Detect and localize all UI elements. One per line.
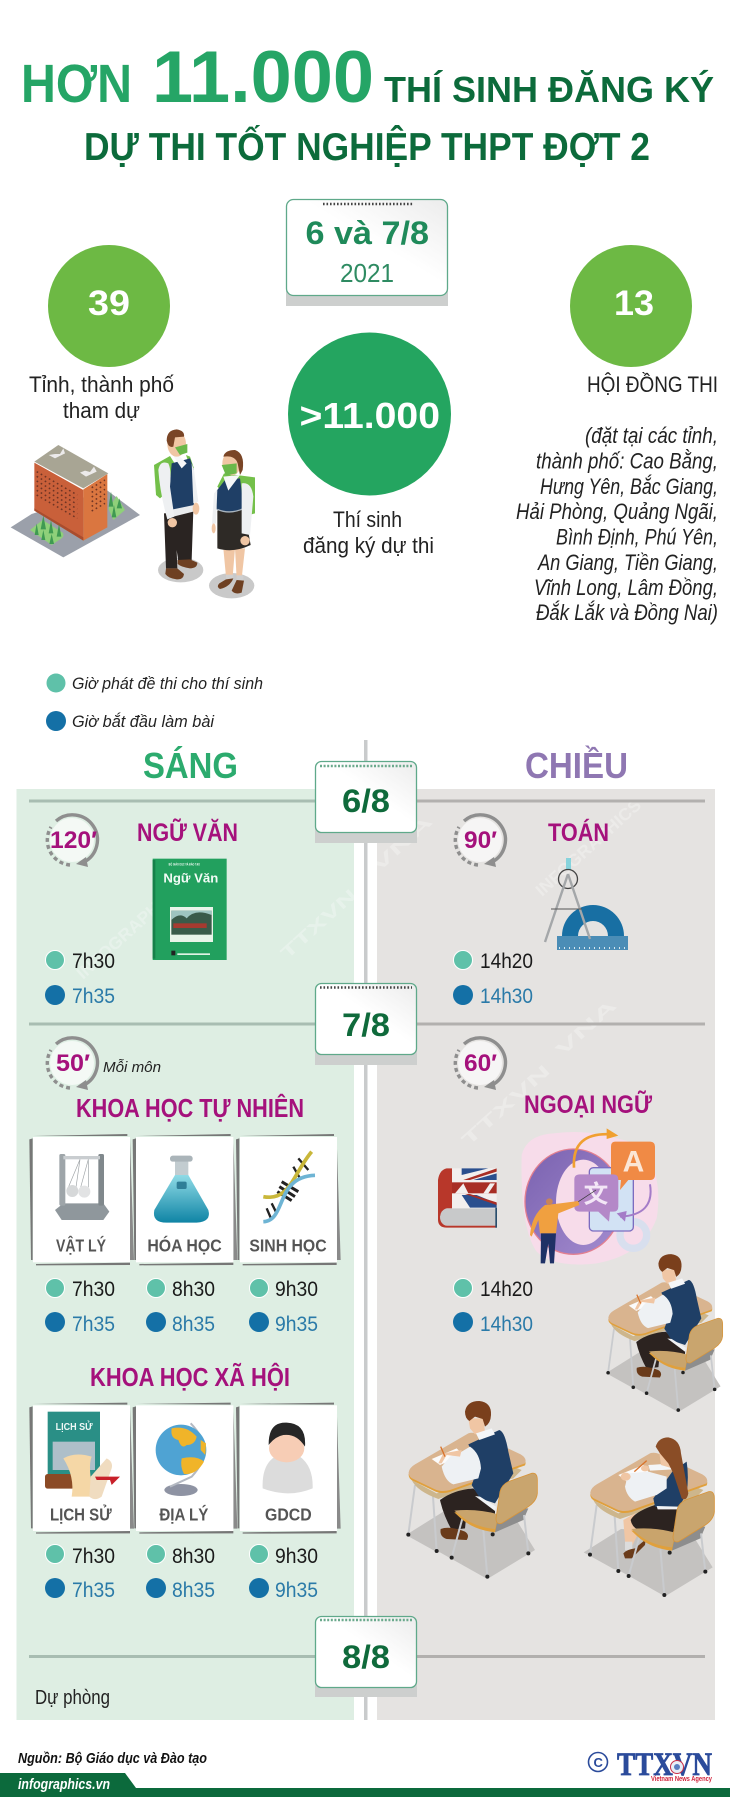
icon: compass and protractor	[545, 858, 628, 950]
watermarks: VNA	[368, 812, 436, 876]
stat: more than 11,000 candidates	[288, 332, 451, 558]
subject: foreign language: NGOẠI NGỮ	[524, 1089, 652, 1119]
times: Toán	[453, 950, 533, 1008]
times: biology: 9h30	[275, 1278, 318, 1301]
icon: male student with mask	[154, 429, 203, 582]
date tab: 8/8: 8/8	[342, 1639, 390, 1675]
icon: English book	[438, 1168, 497, 1228]
card: geography: ĐỊA LÝ	[159, 1504, 208, 1525]
legend	[46, 674, 263, 731]
times: history	[45, 1544, 115, 1602]
title	[21, 37, 714, 169]
stat: 39 provinces: 39	[88, 284, 130, 323]
calendar: exam dates	[286, 200, 448, 306]
stat: more than 11,000 candidates: đăng ký dự thi	[303, 533, 434, 558]
timer: 120 minutes	[47, 815, 97, 867]
icon: male student at desk, lower left	[406, 1401, 537, 1579]
watermarks: INFOGRAPHICS	[73, 879, 186, 983]
logo: TTXVN: Vietnam News Agency	[651, 1776, 712, 1783]
card: physics	[29, 1134, 134, 1265]
times: biology	[249, 1278, 318, 1336]
subject: Ngữ Văn: NGỮ VĂN	[137, 817, 238, 847]
text block: council locations	[516, 423, 718, 625]
date tab: 7/8: 7/8	[342, 1007, 390, 1043]
times: geography	[146, 1544, 215, 1602]
title: DỰ THI TỐT NGHIỆP THPT ĐỢT 2	[84, 124, 650, 169]
stat: 39 provinces	[29, 245, 174, 423]
card: chemistry	[133, 1134, 237, 1265]
timer: 60 minutes: 60′	[464, 1050, 497, 1077]
stat: 39 provinces: Tỉnh, thành phố	[29, 372, 174, 397]
icon: literature textbook	[153, 859, 227, 960]
timer: 90 minutes: 90′	[464, 827, 497, 854]
timer: 60 minutes	[455, 1038, 505, 1090]
icon: literature textbook: BỘ GIÁO DỤC VÀ ĐÀO TẠO	[169, 862, 200, 867]
timer: 50 minutes each subject: 50′	[56, 1050, 90, 1077]
times: physics: 7h30	[72, 1278, 115, 1301]
times: Ngữ Văn	[45, 950, 115, 1008]
stat: 13 exam councils	[570, 245, 718, 397]
timer: 120 minutes: 120′	[50, 827, 97, 854]
calendar: exam dates: 2021	[340, 258, 394, 288]
icon: female student at desk, lower right	[584, 1437, 714, 1597]
watermarks: TTXVN	[458, 1061, 554, 1150]
times: foreign language: 14h30	[480, 1313, 533, 1336]
stat: more than 11,000 candidates: >11.000	[300, 395, 440, 436]
panel: morning background	[16, 789, 354, 1720]
times: civics: 9h30	[275, 1545, 318, 1568]
times: geography: 8h30	[172, 1545, 215, 1568]
footer bar: infographics.vn	[18, 1776, 110, 1793]
footer bar	[0, 1773, 730, 1797]
logo: TTXVN: C	[594, 1755, 604, 1770]
date tab: 8/8	[315, 1616, 417, 1697]
times: physics: 7h35	[72, 1313, 115, 1336]
stat: more than 11,000 candidates: Thí sinh	[333, 507, 402, 532]
stat: 39 provinces: tham dự	[63, 398, 140, 423]
heading: natural sciences: KHOA HỌC TỰ NHIÊN	[76, 1093, 304, 1123]
logo: TTXVN	[588, 1747, 712, 1783]
times: history: 7h35	[72, 1579, 115, 1602]
times: Ngữ Văn: 7h35	[72, 985, 115, 1008]
title: THÍ SINH ĐĂNG KÝ	[384, 69, 714, 110]
times: Toán: 14h20	[480, 950, 533, 973]
panel: afternoon background	[377, 789, 715, 1720]
times: foreign language	[453, 1278, 533, 1336]
card: history: LỊCH SỬ	[56, 1420, 93, 1433]
watermarks: INFOGRAPHICS	[532, 796, 645, 900]
heading: morning: SÁNG	[143, 745, 238, 786]
watermarks: TTXVN	[277, 885, 360, 963]
icon: building	[11, 445, 140, 557]
logo: TTXVN: TTXVN	[617, 1747, 712, 1783]
times: biology: 9h35	[275, 1313, 318, 1336]
card: chemistry: HÓA HỌC	[147, 1235, 222, 1256]
card: biology: SINH HỌC	[249, 1236, 327, 1256]
timer: 50 minutes each subject	[47, 1038, 161, 1090]
calendar: exam dates: 6 và 7/8	[306, 215, 429, 251]
icon: translation illustration: 文	[584, 1180, 609, 1208]
icon: literature textbook: Ngữ Văn	[163, 871, 218, 886]
icon: translation illustration: A	[623, 1146, 644, 1179]
date tab: 7/8	[315, 984, 417, 1065]
watermarks: VNA	[552, 996, 620, 1060]
times: history: 7h30	[72, 1545, 115, 1568]
subject: Toán: TOÁN	[548, 818, 609, 847]
times: Ngữ Văn: 7h30	[72, 950, 115, 973]
card: civics	[236, 1403, 341, 1534]
times: civics: 9h35	[275, 1579, 318, 1602]
times: chemistry: 8h30	[172, 1278, 215, 1301]
card: civics: GDCD	[265, 1505, 312, 1525]
card: history	[29, 1403, 134, 1534]
heading: afternoon: CHIỀU	[525, 745, 628, 786]
legend: Giờ bắt đầu làm bài	[72, 712, 215, 731]
icon: female student with mask	[209, 450, 255, 598]
date tab: 6/8: 6/8	[342, 783, 390, 819]
times: Toán: 14h30	[480, 985, 533, 1008]
watermarks	[73, 796, 645, 1150]
icon: male student at desk, upper right	[606, 1254, 723, 1412]
times: civics	[249, 1544, 318, 1602]
times: chemistry: 8h35	[172, 1313, 215, 1336]
icon: translation illustration	[522, 1128, 658, 1264]
times: physics	[45, 1278, 115, 1336]
times: chemistry	[146, 1278, 215, 1336]
timer: 90 minutes	[455, 815, 505, 867]
times: foreign language: 14h20	[480, 1278, 533, 1301]
title: 11.000	[152, 37, 374, 118]
heading: social sciences: KHOA HỌC XÃ HỘI	[90, 1362, 290, 1392]
card: geography	[133, 1403, 237, 1534]
title: HƠN	[21, 54, 132, 114]
times: geography: 8h35	[172, 1579, 215, 1602]
card: physics: VẬT LÝ	[56, 1235, 106, 1256]
text: reserve day: Dự phòng	[35, 1687, 110, 1709]
timer: 50 minutes each subject: Mỗi môn	[103, 1059, 161, 1076]
source note: Nguồn: Bộ Giáo dục và Đào tạo	[18, 1750, 207, 1767]
card: biology	[236, 1134, 341, 1265]
stat: 13 exam councils: 13	[614, 284, 654, 323]
card: history: LỊCH SỬ	[50, 1504, 112, 1525]
date tab: 6/8	[315, 762, 417, 843]
legend: Giờ phát đề thi cho thí sinh	[72, 674, 263, 693]
